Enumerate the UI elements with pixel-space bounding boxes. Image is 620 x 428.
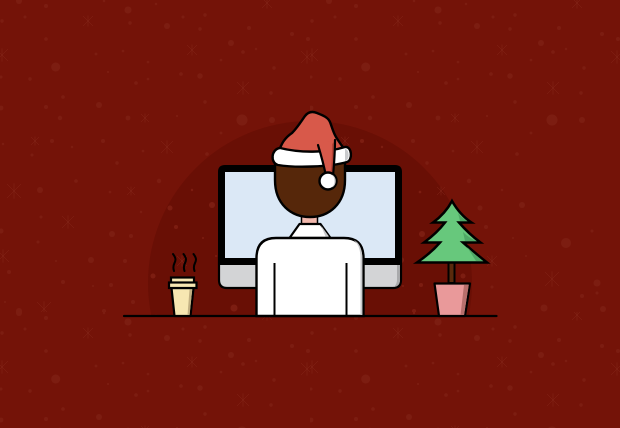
- person: [256, 160, 364, 317]
- icon: coffee cup: [169, 254, 196, 316]
- pompom: [320, 172, 336, 190]
- hat tail: [318, 140, 335, 176]
- backdrop circle: [148, 122, 472, 315]
- neck: [302, 214, 318, 225]
- cup body: [172, 288, 194, 316]
- monitor stand base: [219, 258, 401, 288]
- tree foliage: [417, 201, 487, 262]
- hat cone: [279, 112, 345, 160]
- santa hat: [273, 112, 351, 190]
- desk line: [124, 315, 496, 317]
- head: [275, 160, 345, 217]
- icon: monitor: [218, 165, 402, 288]
- collar: [290, 224, 330, 238]
- hat band: [273, 147, 351, 167]
- flower pot: [434, 284, 470, 316]
- cup lid rim: [169, 282, 196, 288]
- torso: [256, 238, 364, 316]
- sleeve seams: [274, 263, 346, 317]
- icon: christmas tree: [417, 201, 487, 316]
- tree trunk: [448, 262, 454, 283]
- monitor screen: [225, 172, 395, 258]
- monitor bezel: [218, 165, 402, 265]
- steam: [173, 254, 196, 271]
- cup lid: [171, 278, 194, 283]
